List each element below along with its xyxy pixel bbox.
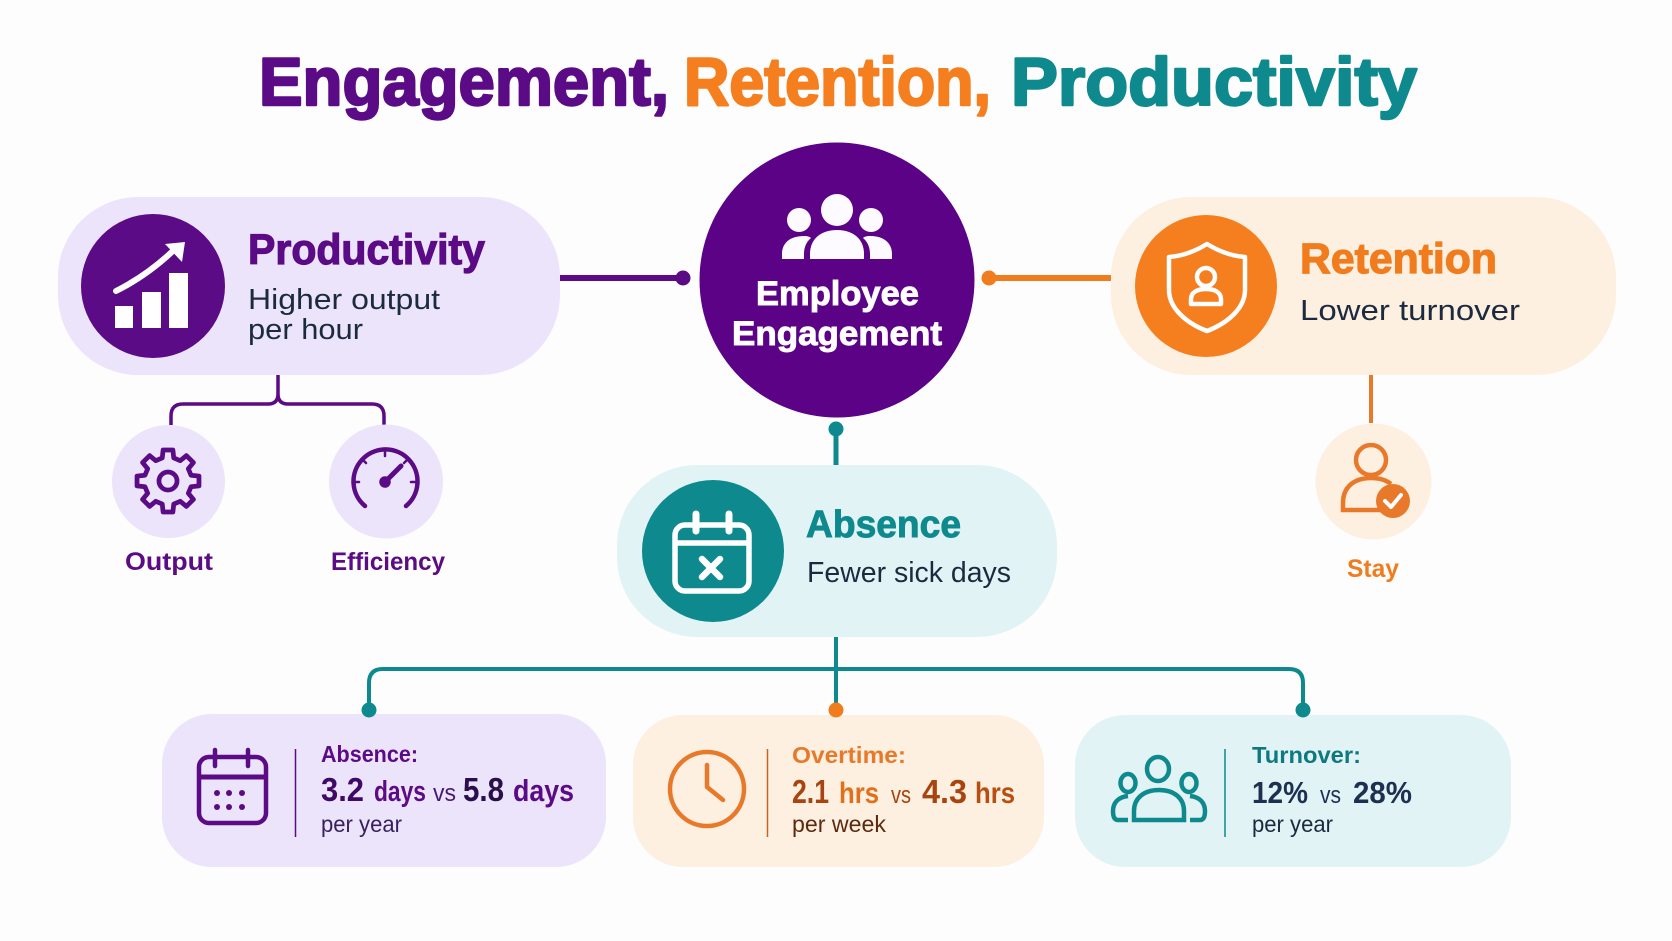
text: higher output per hour: Higher output bbox=[248, 284, 440, 316]
metric card: overtime bbox=[633, 715, 1044, 867]
metric card: absence bbox=[162, 714, 606, 867]
connector: engagement to retention bbox=[982, 270, 1111, 286]
icon: calendar bbox=[199, 750, 266, 823]
connector: productivity to engagement bbox=[560, 270, 690, 286]
text: higher output per hour bbox=[248, 284, 440, 346]
icon: speedometer bbox=[353, 449, 418, 506]
icon: person with check badge bbox=[1343, 445, 1410, 518]
icon: rising bar chart bbox=[115, 242, 188, 328]
text: per week: per week bbox=[792, 811, 887, 837]
values: 12% vs 28% bbox=[1252, 775, 1412, 810]
text: fewer sick days: Fewer sick days bbox=[807, 557, 1011, 589]
values: 2.1 hrs vs 4.3 hrs: 4.3 bbox=[922, 773, 967, 810]
label: turnover: Turnover: bbox=[1252, 742, 1361, 768]
connector: engagement to absence bbox=[828, 422, 844, 465]
heading: absence: Absence bbox=[806, 504, 961, 546]
values: 12% vs 28%: vs bbox=[1320, 782, 1341, 809]
panel: retention bbox=[1111, 197, 1616, 375]
text: per year: per year bbox=[1252, 811, 1333, 837]
label: efficiency: Efficiency bbox=[331, 548, 445, 576]
values: 3.2 days vs 5.8 days bbox=[321, 771, 574, 808]
heading: productivity: Productivity bbox=[248, 226, 485, 274]
values: 2.1 hrs vs 4.3 hrs: 2.1 bbox=[792, 773, 829, 810]
icon: shield with person bbox=[1169, 244, 1245, 331]
text: per year: per year bbox=[321, 811, 402, 837]
connector: absence to metric cards bbox=[362, 637, 1310, 718]
heading: employee engagement: Engagement bbox=[732, 315, 942, 353]
text: higher output per hour: per hour bbox=[248, 314, 363, 346]
values: 12% vs 28%: 12% bbox=[1252, 775, 1308, 810]
icon: calendar with cross bbox=[675, 514, 749, 591]
values: 3.2 days vs 5.8 days: 5.8 bbox=[463, 771, 504, 808]
title: Retention, bbox=[684, 44, 991, 120]
heading: retention: Retention bbox=[1300, 235, 1497, 283]
heading: employee engagement: Employee bbox=[756, 275, 919, 313]
values: 2.1 hrs vs 4.3 hrs bbox=[792, 773, 1015, 810]
values: 3.2 days vs 5.8 days: days bbox=[374, 776, 426, 808]
label: stay: Stay bbox=[1347, 555, 1399, 583]
sub-item: output bbox=[112, 425, 225, 576]
panel: absence bbox=[617, 465, 1057, 637]
connector: productivity branches bbox=[171, 375, 384, 425]
sub-item: efficiency bbox=[329, 424, 445, 576]
label: output: Output bbox=[125, 548, 214, 576]
values: 2.1 hrs vs 4.3 hrs: vs bbox=[891, 782, 911, 809]
connector: retention to stay bbox=[1369, 375, 1373, 423]
title: Engagement, bbox=[259, 44, 669, 120]
heading: employee engagement bbox=[732, 275, 942, 353]
text: lower turnover: Lower turnover bbox=[1300, 295, 1520, 327]
panel: productivity bbox=[58, 197, 560, 375]
values: 2.1 hrs vs 4.3 hrs: hrs bbox=[975, 777, 1015, 810]
values: 3.2 days vs 5.8 days: 3.2 bbox=[321, 771, 364, 808]
icon: clock bbox=[670, 752, 744, 826]
icon: team outline bbox=[1113, 757, 1205, 820]
label: absence: Absence: bbox=[321, 741, 418, 767]
title: Productivity bbox=[1011, 44, 1417, 120]
icon: group of people bbox=[782, 194, 892, 259]
title bbox=[259, 44, 1417, 120]
values: 12% vs 28%: 28% bbox=[1353, 775, 1412, 810]
label: overtime: Overtime: bbox=[792, 742, 906, 768]
panel: central employee engagement bbox=[700, 142, 974, 418]
values: 3.2 days vs 5.8 days: days bbox=[513, 773, 574, 808]
values: 3.2 days vs 5.8 days: vs bbox=[433, 780, 456, 807]
metric card: turnover bbox=[1075, 715, 1511, 867]
values: 2.1 hrs vs 4.3 hrs: hrs bbox=[839, 777, 879, 810]
sub-item: stay bbox=[1316, 424, 1432, 583]
icon: gear bbox=[137, 450, 199, 512]
